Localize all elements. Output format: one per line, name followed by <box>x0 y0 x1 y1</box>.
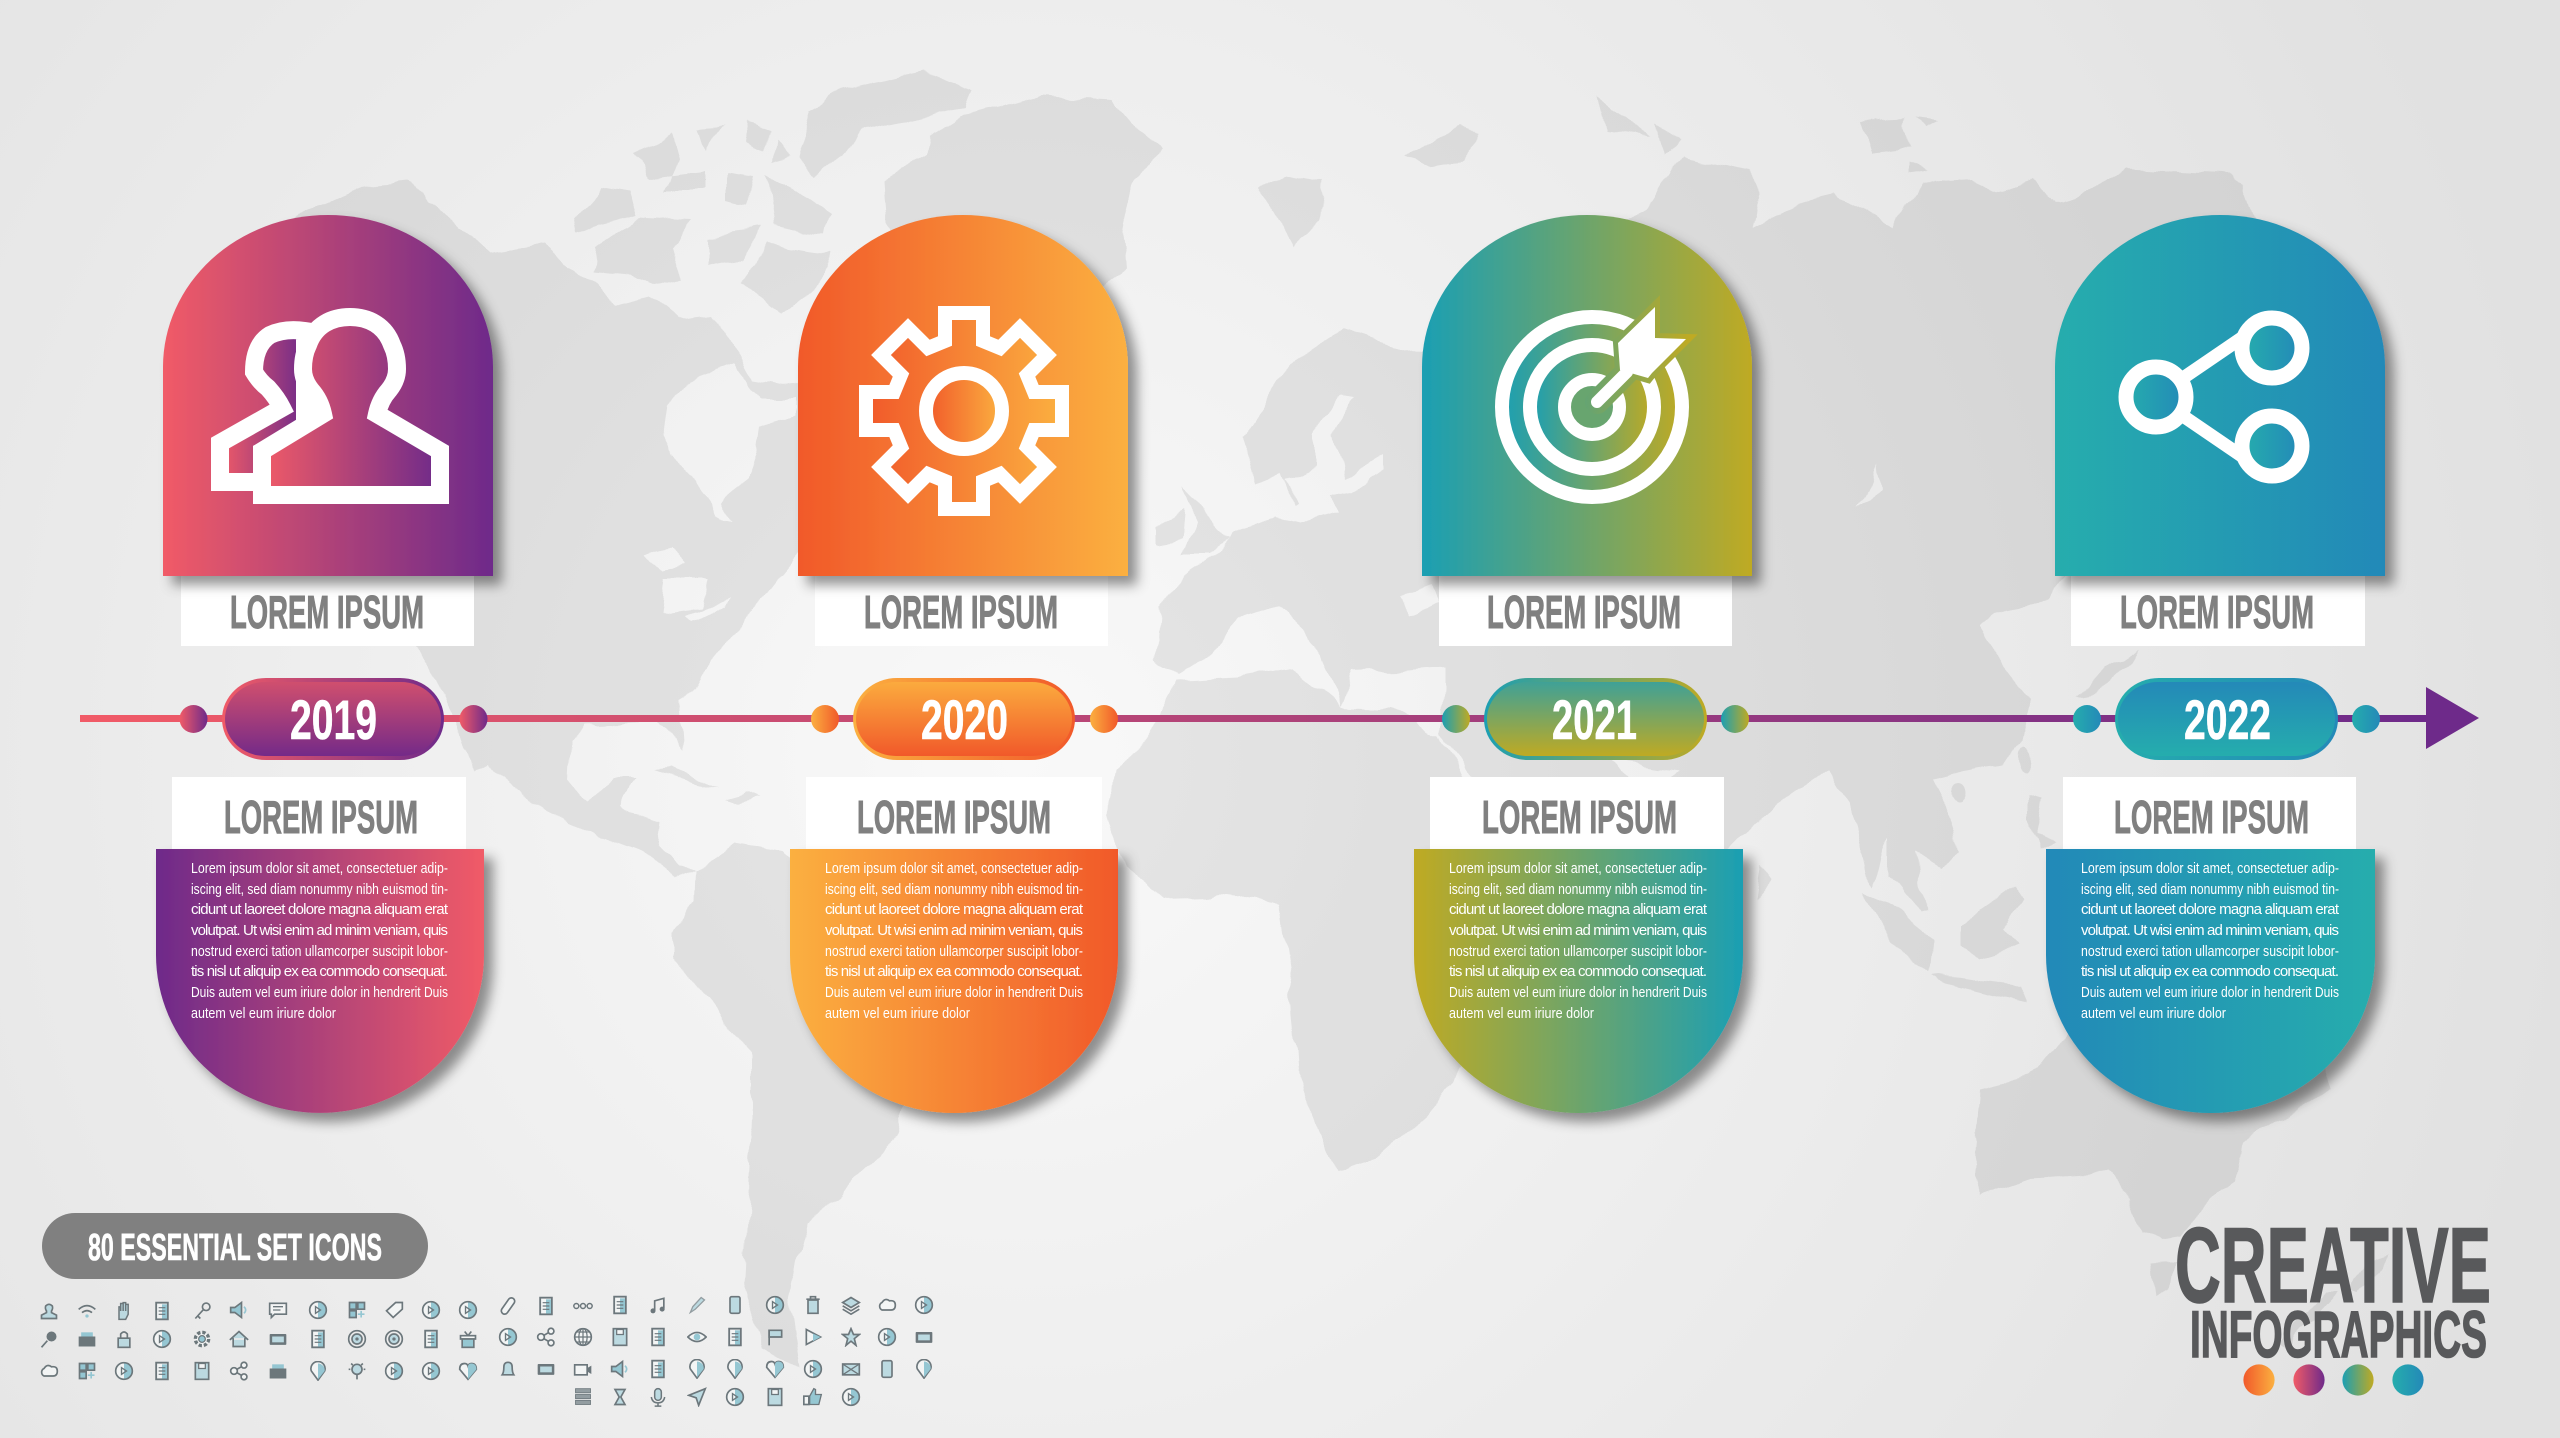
icon: share <box>2126 318 2302 476</box>
body text 2020: tis nisl ut aliquip ex ea commodo consequat. <box>825 963 1083 980</box>
year pill 2020 <box>853 678 1075 760</box>
column 2021 <box>1414 215 1752 1113</box>
text panel 2020 <box>790 849 1118 1113</box>
bottom label 2022 <box>2063 777 2356 849</box>
body text 2021: volutpat. Ut wisi enim ad minim veniam, quis <box>1449 922 1707 939</box>
body text 2021: tis nisl ut aliquip ex ea commodo consequat. <box>1449 963 1707 980</box>
body text 2020 <box>825 860 1084 1022</box>
arch panel 2021 <box>1422 215 1752 576</box>
body text 2022: tis nisl ut aliquip ex ea commodo consequat. <box>2081 963 2339 980</box>
body text 2019: Duis autem vel eum iriure dolor in hendrerit Duis <box>191 984 448 1001</box>
arrow head <box>2426 687 2479 749</box>
top label 2019 <box>181 576 474 646</box>
body text 2022: Lorem ipsum dolor sit amet, consectetuer adip- <box>2081 860 2339 877</box>
year pill 2020: 2020 <box>921 688 1008 751</box>
badge: 80 essential set icons <box>42 1213 428 1279</box>
top label 2021 <box>1439 576 1732 646</box>
body text 2022: nostrud exerci tation ullamcorper suscipit lobor- <box>2081 943 2339 960</box>
bottom label 2021: LOREM IPSUM <box>1482 791 1677 843</box>
icon: target with arrow <box>1502 307 1686 497</box>
column 2020 <box>790 215 1128 1113</box>
icon: gear <box>866 313 1062 509</box>
bottom label 2019 <box>172 777 466 849</box>
column 2022 <box>2046 215 2385 1113</box>
body text 2020: Duis autem vel eum iriure dolor in hendrerit Duis <box>825 984 1083 1001</box>
logo: creative infographics <box>2175 1205 2491 1396</box>
body text 2020: cidunt ut laoreet dolore magna aliquam erat <box>825 901 1084 918</box>
body text 2019: iscing elit, sed diam nonummy nibh euismod tin- <box>191 881 448 898</box>
year pill 2022: 2022 <box>2184 688 2271 751</box>
bottom label 2021 <box>1430 777 1724 849</box>
body text 2021: autem vel eum iriure dolor <box>1449 1005 1594 1022</box>
arch panel 2020 <box>798 215 1128 576</box>
body text 2019: Lorem ipsum dolor sit amet, consectetuer adip- <box>191 860 448 877</box>
body text 2022: iscing elit, sed diam nonummy nibh euismod tin- <box>2081 881 2339 898</box>
body text 2022: Duis autem vel eum iriure dolor in hendrerit Duis <box>2081 984 2339 1001</box>
badge: 80 essential set icons: 80 ESSENTIAL SET ICONS <box>88 1227 382 1269</box>
icon set grid <box>42 1297 932 1406</box>
top label 2021: LOREM IPSUM <box>1487 586 1681 638</box>
top label 2022: LOREM IPSUM <box>2120 586 2314 638</box>
arch panel 2019 <box>163 215 493 576</box>
body text 2019: cidunt ut laoreet dolore magna aliquam erat <box>191 901 449 918</box>
logo colour dots <box>2243 1364 2424 1396</box>
top label 2019: LOREM IPSUM <box>230 586 424 638</box>
body text 2020: volutpat. Ut wisi enim ad minim veniam, quis <box>825 922 1083 939</box>
body text 2021 <box>1449 860 1708 1022</box>
body text 2020: iscing elit, sed diam nonummy nibh euismod tin- <box>825 881 1083 898</box>
column 2019 <box>156 215 493 1113</box>
timeline line with arrow <box>80 687 2479 749</box>
top label 2020 <box>815 576 1108 646</box>
body text 2022: autem vel eum iriure dolor <box>2081 1005 2226 1022</box>
year pill 2021: 2021 <box>1552 688 1637 751</box>
timeline dots 2019 <box>180 705 488 733</box>
body text 2021: Duis autem vel eum iriure dolor in hendrerit Duis <box>1449 984 1707 1001</box>
timeline dots 2022 <box>2073 705 2380 733</box>
bottom label 2020 <box>806 777 1102 849</box>
timeline dots 2021 <box>1442 705 1749 733</box>
body text 2021: iscing elit, sed diam nonummy nibh euismod tin- <box>1449 881 1707 898</box>
world map <box>294 70 2388 1368</box>
text panel 2019 <box>156 849 484 1113</box>
body text 2019: autem vel eum iriure dolor <box>191 1005 336 1022</box>
body text 2020: Lorem ipsum dolor sit amet, consectetuer adip- <box>825 860 1083 877</box>
body text 2021: Lorem ipsum dolor sit amet, consectetuer adip- <box>1449 860 1707 877</box>
body text 2019: nostrud exerci tation ullamcorper suscipit lobor- <box>191 943 448 960</box>
text panel 2022 <box>2046 849 2375 1113</box>
year pill 2019: 2019 <box>290 688 377 751</box>
top label 2022 <box>2071 576 2365 646</box>
bottom label 2019: LOREM IPSUM <box>224 791 418 843</box>
body text 2021: cidunt ut laoreet dolore magna aliquam erat <box>1449 901 1708 918</box>
body text 2022: cidunt ut laoreet dolore magna aliquam erat <box>2081 901 2340 918</box>
body text 2020: autem vel eum iriure dolor <box>825 1005 970 1022</box>
body text 2022: volutpat. Ut wisi enim ad minim veniam, quis <box>2081 922 2339 939</box>
arch panel 2022 <box>2055 215 2385 576</box>
body text 2019 <box>191 860 449 1022</box>
top label 2020: LOREM IPSUM <box>864 586 1058 638</box>
body text 2020: nostrud exerci tation ullamcorper suscipit lobor- <box>825 943 1083 960</box>
bottom label 2022: LOREM IPSUM <box>2114 791 2309 843</box>
icon: people <box>220 317 440 495</box>
body text 2019: tis nisl ut aliquip ex ea commodo consequat. <box>191 963 448 980</box>
year pill 2022 <box>2115 678 2338 760</box>
timeline dots 2020 <box>811 705 1118 733</box>
year pill 2019 <box>222 678 444 760</box>
body text 2022 <box>2081 860 2340 1022</box>
body text 2021: nostrud exerci tation ullamcorper suscipit lobor- <box>1449 943 1707 960</box>
bottom label 2020: LOREM IPSUM <box>857 791 1051 843</box>
text panel 2021 <box>1414 849 1743 1113</box>
body text 2019: volutpat. Ut wisi enim ad minim veniam, quis <box>191 922 448 939</box>
year pill 2021 <box>1484 678 1707 760</box>
